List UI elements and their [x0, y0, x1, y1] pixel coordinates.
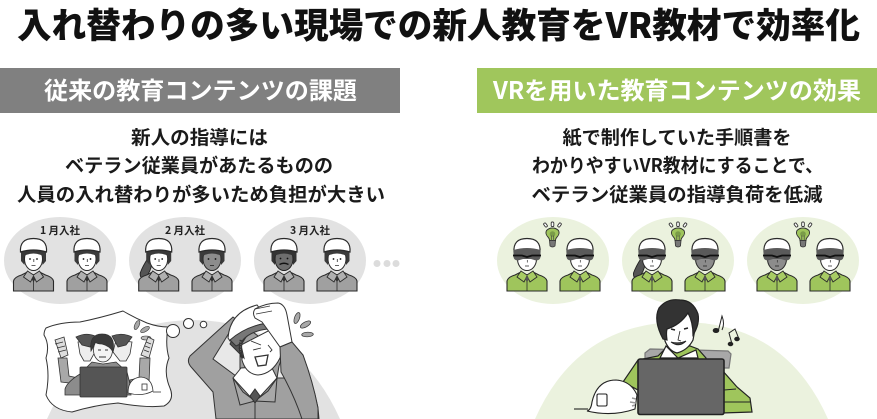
text block: effect description: わかりやすいVR教材にすることで、	[532, 151, 823, 178]
text block: effect description: ベテラン従業員の指導負荷を低減	[532, 180, 822, 207]
text block: effect description: 紙で制作していた手順書を	[562, 123, 792, 150]
group: January hires: 1 月入社	[40, 223, 81, 238]
group: March hires: 3 月入社	[290, 223, 331, 238]
illustration: stressed veteran worker	[188, 303, 319, 419]
right arm	[722, 370, 752, 413]
icon: helmet on desk	[128, 377, 161, 395]
heading: conventional	[0, 68, 400, 113]
text block: issue description: 人員の入れ替わりが多いため負担が大きい	[17, 180, 385, 207]
hair	[657, 300, 698, 340]
hair	[230, 326, 253, 358]
left arm and torso	[623, 346, 707, 390]
text block: issue description	[17, 123, 385, 207]
body and raised arm	[188, 317, 319, 419]
icon: music notes	[713, 316, 739, 346]
icon: ellipsis dots	[374, 260, 400, 267]
panel: conventional content issues	[0, 68, 400, 419]
group: March hires	[254, 217, 366, 304]
head	[241, 330, 283, 375]
icon: sweat drops in bubble	[133, 320, 151, 340]
group: February hires	[129, 217, 241, 304]
face	[663, 308, 697, 353]
icon: helmet	[574, 380, 637, 414]
icon: sweat drops	[293, 312, 313, 337]
panel: VR content effects	[477, 68, 877, 419]
face details	[251, 341, 272, 352]
face details	[671, 328, 688, 330]
figure: troubled worker at laptop	[65, 334, 131, 397]
illustration: relaxed worker with laptop	[623, 300, 752, 414]
group: VR trainees 2	[622, 217, 734, 304]
illustration backdrop	[47, 320, 340, 419]
text block: issue description: 新人の指導には	[131, 123, 268, 150]
group: January hires	[4, 217, 116, 304]
illustration: thought bubble	[44, 311, 207, 412]
figures: supervisors holding manuals	[55, 334, 154, 386]
hand	[254, 303, 292, 347]
group: VR trainees 1	[497, 217, 609, 304]
heading: VR effects: VRを用いた教育コンテンツの効果	[492, 71, 861, 106]
group: VR trainees 3	[747, 217, 859, 304]
helmet	[228, 305, 270, 341]
laptop	[638, 359, 724, 414]
illustration backdrop	[535, 322, 828, 419]
text block: issue description: ベテラン従業員があたるものの	[65, 151, 333, 178]
heading: conventional: 従来の教育コンテンツの課題	[44, 71, 357, 106]
right forearm	[280, 342, 318, 419]
group: February hires: 2 月入社	[165, 223, 206, 238]
chair	[645, 349, 731, 368]
text block: effect description	[532, 123, 823, 207]
